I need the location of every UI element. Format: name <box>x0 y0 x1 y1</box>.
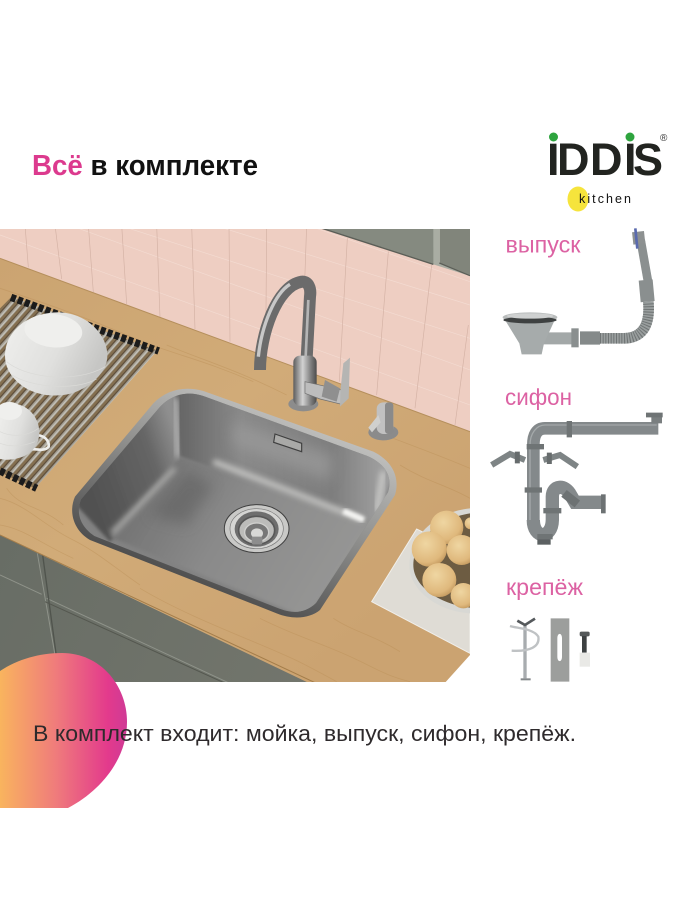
sink rim <box>72 389 397 617</box>
registered mark: ® <box>660 133 668 144</box>
wall cabinets <box>322 229 470 276</box>
sink <box>70 382 400 618</box>
sink back corner ridge <box>175 398 178 457</box>
overflow slot <box>274 434 302 452</box>
sink floor <box>110 457 373 618</box>
sink basin <box>79 394 390 612</box>
part image: siphon <box>492 415 663 542</box>
logo icon: green dot right <box>626 132 634 142</box>
drain <box>224 505 289 553</box>
screw with plug <box>580 632 590 667</box>
bowl of apricots <box>412 508 470 614</box>
mounting plate <box>551 618 569 682</box>
sink fold highlight <box>213 462 362 519</box>
white bowl <box>5 311 107 396</box>
faucet <box>258 282 350 411</box>
sink left wall <box>79 398 174 542</box>
dish rack <box>0 297 159 488</box>
label: крепёж: крепёж <box>506 574 584 600</box>
label: сифон: сифон <box>505 384 572 410</box>
description text: В комплект входит: мойка, выпуск, сифон, крепёж. <box>33 721 576 746</box>
gradient circle accent <box>0 653 127 808</box>
part image: mounting hardware <box>510 618 590 682</box>
photo: kitchen sink on wooden countertop <box>0 200 477 690</box>
clamp <box>510 619 539 679</box>
logo sub-brand: kitchen <box>579 192 631 206</box>
countertop <box>0 258 470 688</box>
label: выпуск: выпуск <box>506 232 581 258</box>
soap dispenser <box>368 402 398 440</box>
brand logo: IDDIS kitchen <box>547 132 668 212</box>
logo icon: yellow blob <box>568 186 588 212</box>
logo icon: green dot left <box>549 132 558 142</box>
logo wordmark: IDDIS <box>547 134 663 185</box>
towel <box>372 529 470 653</box>
sink back wall <box>176 394 390 520</box>
part image: drain outlet with overflow hose <box>503 228 649 354</box>
white cup <box>0 402 49 460</box>
base cabinets <box>0 536 307 682</box>
title: Всё в комплекте <box>32 150 258 182</box>
tiled wall <box>0 229 470 431</box>
